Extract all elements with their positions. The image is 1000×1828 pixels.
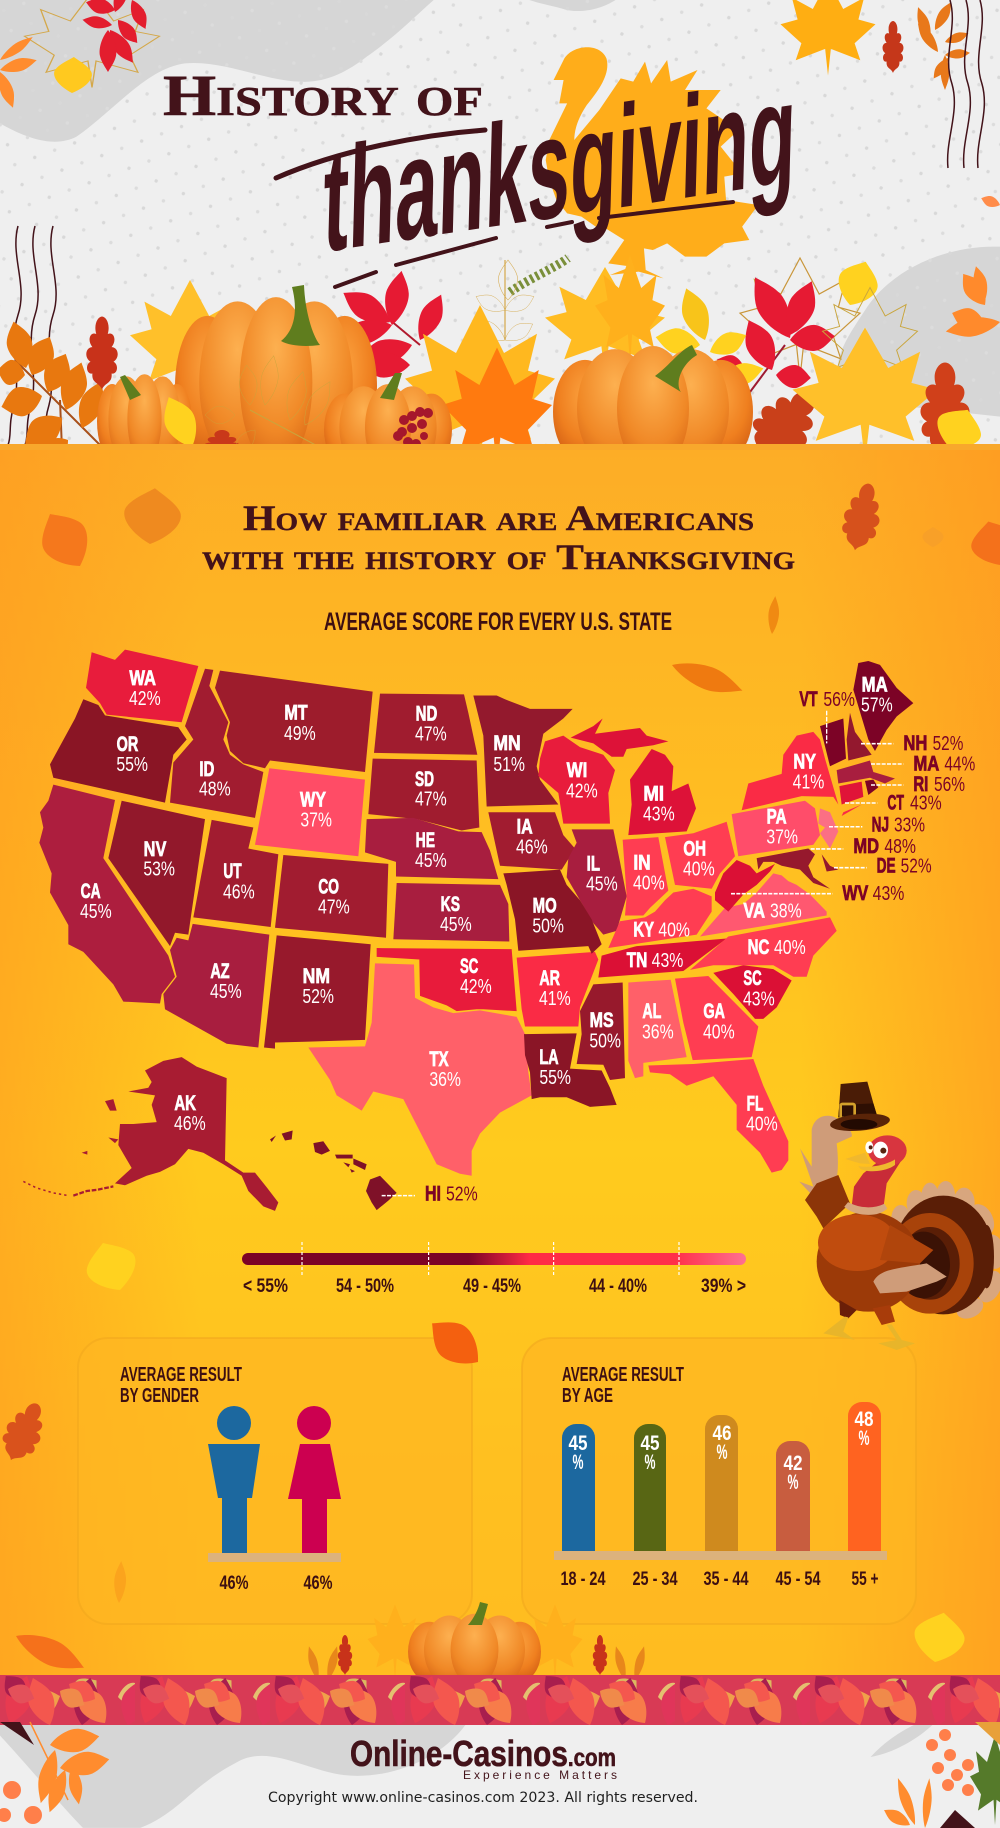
state: WI bbox=[538, 736, 615, 824]
callout: MA: 44% bbox=[944, 752, 975, 776]
orange leaves right bbox=[944, 265, 1000, 341]
state: MT bbox=[215, 671, 373, 772]
red sprig left bbox=[336, 269, 451, 378]
dark oak leaf bbox=[738, 376, 832, 474]
state: VA: VA bbox=[743, 899, 765, 923]
state: NC bbox=[690, 917, 837, 977]
state: NJ bbox=[818, 808, 838, 849]
golden leaves behind left pumpkin bbox=[130, 280, 250, 400]
header background bbox=[0, 0, 1000, 450]
bottom pumpkin group bbox=[305, 1602, 648, 1686]
red berries bbox=[393, 407, 433, 449]
state: AK: 46% bbox=[174, 1112, 206, 1135]
state: AR: AR bbox=[539, 967, 560, 990]
state: NY: NY bbox=[793, 750, 816, 774]
dark oak near pumpkin bbox=[204, 430, 240, 460]
footer decoration right bbox=[881, 1722, 1000, 1828]
state: MI: 43% bbox=[643, 802, 675, 826]
callout: NH: NH bbox=[903, 732, 927, 756]
state: TX: 36% bbox=[429, 1068, 461, 1091]
state: PA: PA bbox=[767, 806, 787, 829]
state: IN: IN bbox=[633, 851, 651, 875]
state: MD bbox=[757, 849, 830, 889]
bar: 45-54: 42 bbox=[784, 1452, 802, 1475]
state: MN: 51% bbox=[493, 753, 525, 776]
state: CA: 45% bbox=[80, 900, 112, 923]
head bbox=[845, 1135, 907, 1171]
state: HI: HI bbox=[425, 1182, 441, 1206]
turkey silhouette behind title bbox=[546, 47, 758, 278]
panel: average result by gender: AVERAGE RESULT bbox=[120, 1364, 242, 1386]
state: MO: 50% bbox=[532, 915, 564, 938]
panel: average result by age: AVERAGE RESULT bbox=[562, 1364, 684, 1386]
right yellow maple bbox=[792, 328, 938, 462]
state: OR: OR bbox=[117, 733, 138, 756]
yellow maple centre bbox=[545, 267, 665, 377]
state: NM bbox=[264, 935, 371, 1049]
state: UT: 46% bbox=[223, 880, 255, 904]
state: ID: ID bbox=[199, 758, 214, 781]
state: TX: TX bbox=[429, 1048, 449, 1071]
state: WY: 37% bbox=[300, 809, 332, 832]
state: VT bbox=[820, 718, 846, 766]
bar: 25-34: % bbox=[644, 1451, 656, 1474]
state: AL: AL bbox=[642, 1000, 661, 1023]
pilgrim hat bbox=[829, 1082, 891, 1133]
state: HI: 52% bbox=[446, 1182, 478, 1206]
tail feathers bbox=[891, 1181, 1000, 1323]
turkey mascot bbox=[799, 1082, 1000, 1350]
panel: average result by gender bbox=[78, 1338, 472, 1624]
state: SC: 43% bbox=[743, 987, 775, 1011]
state: CT bbox=[839, 782, 863, 805]
callout: VT: VT bbox=[799, 688, 818, 711]
state: IN: 40% bbox=[633, 871, 665, 895]
bar: 55+ bbox=[848, 1402, 881, 1551]
callout: VT: 56% bbox=[823, 688, 855, 711]
footer background bbox=[0, 1718, 1000, 1828]
state: NV: 53% bbox=[143, 858, 175, 881]
state: IA: IA bbox=[517, 815, 533, 839]
state: FL bbox=[648, 1059, 788, 1173]
panel: average result by age: 25 - 34 bbox=[632, 1569, 678, 1590]
eastern states bbox=[473, 661, 975, 1173]
callout: WV bbox=[731, 882, 904, 906]
callout: WV: 43% bbox=[873, 882, 904, 906]
state: TN: TN bbox=[627, 949, 647, 972]
legs bbox=[823, 1300, 915, 1350]
state: TX bbox=[308, 963, 532, 1176]
callout: CT bbox=[845, 791, 942, 815]
middle pumpkin bbox=[324, 373, 452, 471]
state: NV: NV bbox=[144, 838, 167, 861]
state: AK: AK bbox=[174, 1092, 197, 1115]
right sprig behind pumpkin bbox=[714, 258, 860, 392]
state: MO bbox=[503, 870, 602, 954]
copyright: Copyright www.online-casinos.com 2023. All rights reserved. bbox=[268, 1790, 698, 1806]
state: UT bbox=[193, 820, 278, 927]
state: GA: 40% bbox=[703, 1021, 735, 1044]
decoration: wavy lines left bbox=[8, 226, 56, 445]
decoration: wavy lines right bbox=[948, 0, 984, 168]
state: NY: 41% bbox=[793, 770, 824, 794]
state: OK bbox=[377, 948, 517, 1011]
large yellow maple left bbox=[405, 305, 555, 465]
callout: WV: WV bbox=[842, 882, 869, 906]
state: SD bbox=[368, 759, 479, 831]
state: ID: 48% bbox=[199, 778, 231, 801]
state: ME: 57% bbox=[861, 693, 893, 717]
legend scale: 49 - 45% bbox=[463, 1276, 521, 1297]
state: WA: WA bbox=[129, 667, 156, 690]
state: AR: 41% bbox=[539, 987, 571, 1010]
state: WY bbox=[255, 768, 365, 856]
state: PA: 37% bbox=[766, 825, 798, 849]
state: ND bbox=[374, 694, 477, 755]
state: IA bbox=[488, 812, 575, 870]
bottom right yellow leaf bbox=[929, 400, 989, 458]
right wing hand bbox=[873, 1263, 947, 1293]
state: MA bbox=[837, 761, 895, 783]
left wing bbox=[799, 1116, 852, 1228]
bar: 45-54: % bbox=[788, 1471, 799, 1494]
state: CA: CA bbox=[81, 880, 101, 903]
state: NE: HE bbox=[416, 829, 435, 852]
state: AZ bbox=[163, 924, 269, 1048]
state: OK: 42% bbox=[460, 975, 492, 998]
callout: DE bbox=[834, 855, 932, 878]
decoration: autumn leaves and pumpkins pile bbox=[0, 255, 1000, 474]
bar: 25-34 bbox=[634, 1424, 666, 1551]
callout: NJ: 33% bbox=[894, 813, 925, 837]
right dark oak bbox=[920, 362, 970, 458]
state: WA: 42% bbox=[129, 687, 161, 710]
callout: RI: 56% bbox=[934, 773, 965, 796]
callout: NJ bbox=[829, 813, 925, 837]
state: RI bbox=[865, 780, 878, 795]
state: AR bbox=[517, 952, 598, 1026]
callout: VT bbox=[799, 688, 855, 743]
state: OH bbox=[665, 822, 735, 889]
state: TN: 43% bbox=[652, 949, 683, 972]
footer leaf band bbox=[0, 1675, 1000, 1725]
callout: CT: 43% bbox=[910, 791, 942, 815]
state: ME bbox=[853, 661, 913, 751]
map subtitle: AVERAGE SCORE FOR EVERY U.S. STATE bbox=[324, 608, 672, 636]
state: TN bbox=[598, 938, 727, 977]
state: NH bbox=[847, 713, 872, 761]
left small pumpkin bbox=[97, 374, 192, 464]
yellow leaf bbox=[155, 391, 206, 453]
state: OR bbox=[50, 699, 187, 803]
icon: female figure bbox=[288, 1406, 341, 1553]
bar: 35-44 bbox=[705, 1415, 738, 1551]
state: AL bbox=[628, 980, 687, 1078]
state: MI: MI bbox=[643, 783, 664, 806]
state: GA bbox=[675, 976, 758, 1060]
outline leaves bbox=[205, 354, 338, 458]
state: MN: MN bbox=[493, 732, 521, 756]
bar: 55+: % bbox=[858, 1427, 870, 1450]
main heading: with the history of Thanksgiving bbox=[202, 537, 795, 577]
callout: RI bbox=[871, 773, 965, 796]
state: VA bbox=[700, 873, 827, 937]
bar: 35-44: % bbox=[716, 1441, 728, 1464]
golden outline sprig bbox=[468, 260, 537, 347]
state: PA bbox=[732, 801, 820, 856]
bar: 18-24: 45 bbox=[568, 1432, 588, 1455]
state: GA: GA bbox=[703, 1000, 725, 1023]
panel: average result by age: BY AGE bbox=[562, 1385, 613, 1407]
bar: 25-34: 45 bbox=[640, 1432, 660, 1455]
state: IA: 46% bbox=[516, 835, 548, 859]
orange maple bbox=[442, 348, 552, 472]
decoration: top right leaves bbox=[780, 0, 1000, 210]
main heading bbox=[202, 498, 795, 577]
state: WY: WY bbox=[300, 788, 326, 812]
state: CO: CO bbox=[318, 876, 339, 899]
panel: average result by age: 35 - 44 bbox=[704, 1569, 749, 1590]
state: FL: 40% bbox=[746, 1112, 778, 1136]
state: OH: 40% bbox=[683, 858, 715, 881]
state: DE bbox=[822, 854, 838, 872]
state: AZ: AZ bbox=[210, 960, 230, 983]
leaf on panel corner bbox=[420, 1309, 490, 1376]
state: OK: SC bbox=[460, 955, 478, 978]
bar: 18-24: % bbox=[572, 1451, 584, 1474]
state: WI: WI bbox=[567, 759, 587, 782]
state: LA bbox=[524, 1033, 617, 1107]
logo: Experience Matters bbox=[463, 1768, 617, 1782]
state: CO bbox=[275, 855, 388, 938]
state: MO: MO bbox=[533, 894, 557, 918]
callout: MD: 48% bbox=[884, 835, 916, 858]
state: KS: KS bbox=[441, 893, 460, 916]
icon: male figure bbox=[208, 1406, 260, 1553]
decoration: top left leaves bbox=[0, 0, 160, 110]
state: SC: SC bbox=[743, 967, 762, 990]
footer decoration left bbox=[0, 1722, 111, 1824]
state: AK bbox=[23, 1057, 278, 1211]
state: ME: MA bbox=[862, 673, 888, 697]
state: SD: SD bbox=[415, 768, 434, 791]
yellow leaf floating right bbox=[831, 255, 884, 312]
state: NM: NM bbox=[303, 965, 330, 988]
right large pumpkin bbox=[553, 345, 753, 471]
callout: DE: 52% bbox=[901, 855, 932, 878]
body bbox=[817, 1212, 920, 1312]
main background bbox=[0, 444, 1000, 1730]
state: KS bbox=[393, 883, 509, 942]
title: History of: History of bbox=[163, 63, 483, 128]
state: KY: KY bbox=[633, 918, 654, 942]
state: NC: NC bbox=[748, 936, 769, 959]
state: VA: 38% bbox=[770, 899, 802, 923]
callout: NH: 52% bbox=[933, 732, 963, 756]
outline maple right bbox=[822, 288, 918, 382]
state: NE bbox=[365, 818, 498, 879]
legend scale: 54 - 50% bbox=[336, 1276, 394, 1297]
bar: 35-44: 46 bbox=[712, 1422, 732, 1445]
panel: average result by age: 18 - 24 bbox=[560, 1569, 606, 1590]
state: CA bbox=[39, 785, 175, 1004]
small green sprig bbox=[510, 258, 568, 292]
state: LA: 55% bbox=[539, 1066, 571, 1089]
neck and collar bbox=[846, 1160, 902, 1214]
state: OH: OH bbox=[683, 837, 706, 861]
state: FL: FL bbox=[747, 1092, 763, 1116]
panel: average result by age bbox=[522, 1338, 916, 1624]
state: IL bbox=[567, 829, 627, 935]
state: MI bbox=[571, 718, 696, 835]
state: UT: UT bbox=[223, 860, 242, 883]
large pumpkin bbox=[175, 285, 377, 468]
state: KS: 45% bbox=[440, 913, 472, 936]
panel: average result by age: 45 - 54 bbox=[776, 1569, 821, 1590]
state: IL: 45% bbox=[586, 873, 618, 896]
callout: MA bbox=[871, 752, 975, 776]
callout: NJ: NJ bbox=[872, 813, 889, 837]
state: CO: 47% bbox=[318, 895, 350, 919]
callout: RI: RI bbox=[913, 773, 928, 796]
map of the United States bbox=[23, 650, 975, 1211]
state: KY bbox=[608, 889, 712, 948]
state: MT: 49% bbox=[284, 722, 316, 745]
orange sprig bbox=[0, 316, 118, 466]
state: NC: 40% bbox=[774, 936, 806, 959]
state: WV bbox=[715, 860, 775, 912]
floating leaves bbox=[0, 480, 1000, 1679]
state: NE: 45% bbox=[415, 849, 447, 872]
legend scale: < 55% bbox=[243, 1276, 288, 1297]
state: NV bbox=[108, 801, 205, 946]
state: OR: 55% bbox=[116, 753, 148, 777]
state: IL: IL bbox=[587, 853, 600, 876]
state: LA: LA bbox=[539, 1046, 559, 1069]
logo: Online-Casinos.com bbox=[350, 1733, 616, 1774]
state: NY bbox=[742, 732, 862, 816]
yellow green leaves bbox=[653, 284, 766, 390]
title: thanksgiving script: thanksgiving bbox=[321, 51, 798, 284]
state: SD: 47% bbox=[415, 788, 447, 811]
legend scale bbox=[242, 1242, 746, 1297]
state: ID bbox=[170, 669, 263, 818]
callout: MD bbox=[811, 835, 916, 858]
legend scale: 44 - 40% bbox=[589, 1276, 647, 1297]
panel: average result by gender: 46% bbox=[304, 1573, 333, 1594]
bar: 18-24 bbox=[562, 1424, 595, 1551]
callout: MA: MA bbox=[913, 752, 939, 776]
state: MS: MS bbox=[590, 1009, 614, 1033]
callout: CT: CT bbox=[887, 791, 904, 815]
state: KY: 40% bbox=[658, 918, 690, 942]
main heading: How familiar are Americans bbox=[243, 498, 754, 538]
panel: average result by age: 55 + bbox=[852, 1569, 878, 1590]
bar: 45-54 bbox=[776, 1441, 810, 1551]
legend scale: 39% > bbox=[701, 1276, 746, 1297]
state: ND: ND bbox=[416, 703, 437, 726]
state: AZ: 45% bbox=[210, 980, 242, 1003]
state: MS: 50% bbox=[589, 1029, 621, 1053]
panel: average result by gender: BY GENDER bbox=[120, 1385, 199, 1407]
bar: 55+: 48 bbox=[854, 1408, 874, 1431]
callout: MD: MD bbox=[853, 835, 879, 858]
callout: DE: DE bbox=[877, 855, 896, 878]
state: NM: 52% bbox=[302, 985, 334, 1008]
state: AL: 36% bbox=[642, 1021, 674, 1044]
panel: average result by gender: 46% bbox=[220, 1573, 249, 1594]
state: ND: 47% bbox=[415, 723, 447, 746]
state: MN bbox=[473, 695, 573, 806]
state: HI bbox=[270, 1131, 478, 1210]
callout: NH bbox=[861, 732, 963, 756]
state: SC bbox=[713, 965, 792, 1019]
state: WI: 42% bbox=[566, 779, 598, 803]
state: IN bbox=[623, 837, 668, 916]
state: MT: MT bbox=[284, 701, 308, 725]
state: MS bbox=[577, 982, 625, 1080]
state: WA bbox=[86, 650, 198, 722]
